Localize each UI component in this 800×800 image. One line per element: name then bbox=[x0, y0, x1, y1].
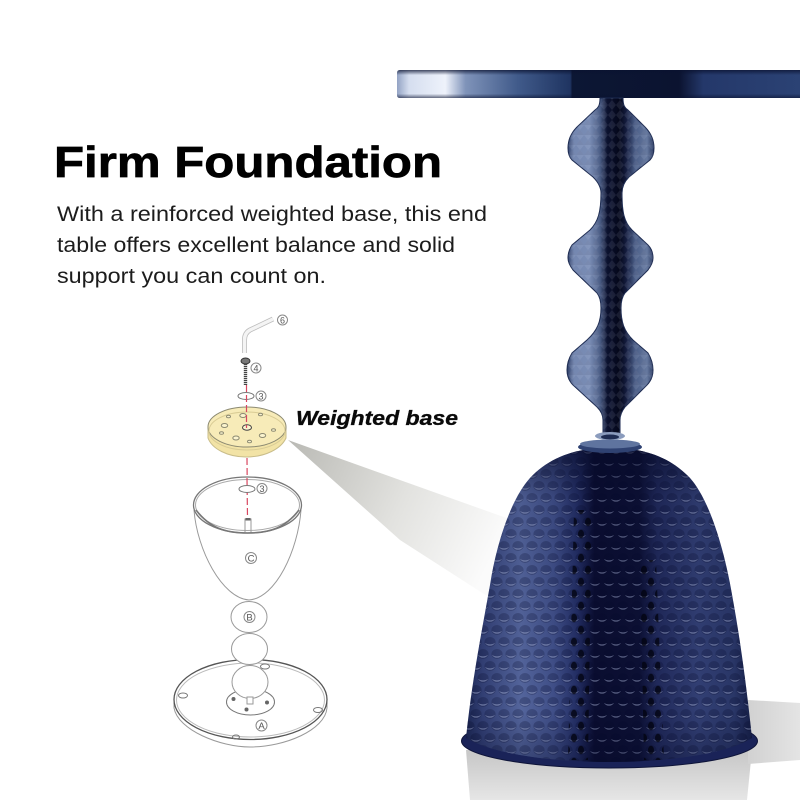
stacked spheres B bbox=[231, 602, 268, 704]
floor shadow bbox=[466, 700, 800, 800]
callout beam bbox=[288, 440, 512, 612]
part label C: C bbox=[248, 554, 255, 564]
red alignment line bbox=[246, 385, 248, 518]
part number 4 bbox=[251, 363, 261, 374]
hammered bell base bbox=[460, 445, 760, 775]
part number 3 lower: 3 bbox=[259, 484, 265, 494]
icon: screw bbox=[241, 358, 250, 385]
beaded stem bbox=[567, 98, 654, 436]
part number 3 upper: 3 bbox=[258, 392, 264, 402]
part label C bbox=[246, 552, 256, 564]
upper washer bbox=[238, 392, 254, 400]
goblet base outline bbox=[194, 477, 302, 600]
description text bbox=[57, 203, 487, 288]
description text: support you can count on. bbox=[57, 265, 326, 288]
part number 4: 4 bbox=[253, 364, 259, 374]
part label B: B bbox=[246, 612, 253, 624]
weighted base disc bbox=[208, 407, 286, 457]
lower washer bbox=[239, 486, 255, 492]
weighted base label: Weighted base bbox=[296, 408, 458, 430]
description text: With a reinforced weighted base, this end bbox=[57, 203, 487, 226]
icon: allen key bbox=[244, 319, 273, 353]
part label A bbox=[256, 720, 267, 732]
side table product bbox=[397, 70, 800, 775]
part number 6: 6 bbox=[280, 316, 285, 326]
exploded assembly diagram bbox=[174, 315, 327, 747]
table top bbox=[397, 70, 800, 98]
part number 3 lower bbox=[257, 484, 267, 494]
part label A: A bbox=[258, 721, 265, 732]
part number 3 upper bbox=[256, 391, 266, 402]
title: Firm Foundation bbox=[54, 138, 442, 187]
bell rim bbox=[462, 714, 758, 768]
collar bbox=[578, 432, 642, 453]
description text: table offers excellent balance and solid bbox=[57, 234, 455, 257]
part label B bbox=[244, 612, 255, 624]
round tray A bbox=[174, 660, 327, 747]
part number 6 bbox=[278, 315, 288, 326]
